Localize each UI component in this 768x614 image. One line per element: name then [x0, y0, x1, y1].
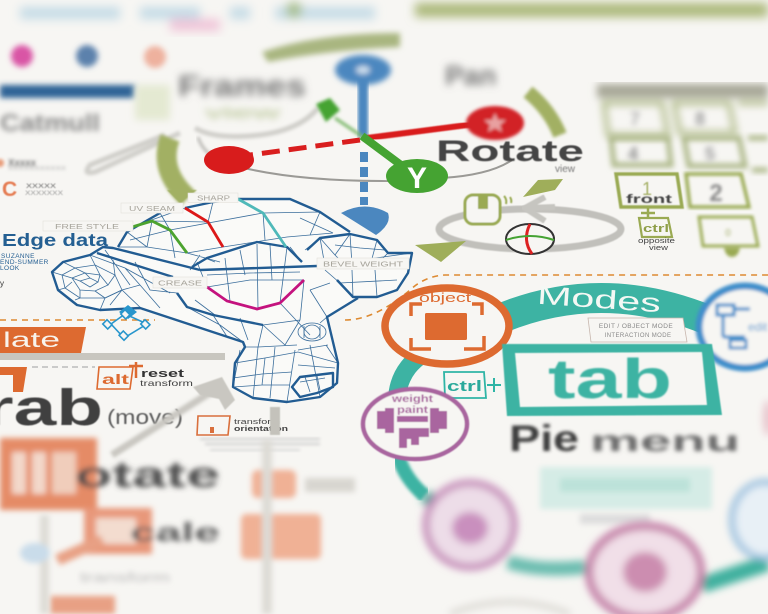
blurred blue bar and gray text [0, 85, 135, 137]
label: bevel weight: BEVEL WEIGHT [323, 260, 404, 268]
gray orbit ellipse [439, 209, 621, 249]
Edge data text block: LOOK [0, 265, 20, 272]
object mode circle [385, 288, 509, 364]
blue mode circle [699, 286, 768, 368]
grab (move) heading [0, 379, 183, 436]
label: bevel weight [317, 258, 409, 269]
key 0 [699, 217, 758, 257]
orange C note: C [2, 178, 17, 201]
olive arrow wedges [415, 179, 563, 262]
orbit arrow [525, 197, 555, 221]
blurred rotate and scale keys: otate [75, 454, 220, 495]
green back axis [316, 98, 363, 137]
label: uv seam [121, 203, 183, 213]
orange G key fragment [0, 367, 27, 392]
blurred heading: Frames: view [205, 105, 281, 122]
icon: vertex selection [103, 305, 150, 340]
blue dashed axis [341, 152, 389, 235]
left edge small notes: Xxxxx [8, 158, 36, 169]
label: crease: CREASE [158, 278, 202, 288]
Rotate heading [436, 135, 584, 175]
label: crease [153, 277, 207, 288]
alt reset transform: transform [140, 378, 193, 388]
blurred heading: Frames: Frames [178, 70, 306, 103]
olive top swoosh [262, 33, 400, 62]
Edge data text block [0, 230, 108, 288]
object mode circle: object [419, 290, 472, 305]
alt reset transform [97, 362, 193, 389]
green Y axis: Y [407, 162, 427, 195]
gray divider [0, 353, 225, 360]
Rotate heading: view [555, 164, 576, 175]
gizmo axes [204, 55, 524, 235]
weight paint circle: paint [397, 405, 429, 416]
Pie menu heading: Pie [509, 418, 579, 459]
left edge small notes [0, 158, 67, 172]
blurred upper keys [597, 91, 768, 135]
ctrl key [638, 218, 675, 252]
blue Z axis top [358, 75, 368, 137]
label: sharp [188, 193, 238, 202]
Translate banner [0, 327, 86, 353]
crease magenta edge [207, 280, 304, 309]
ctrl key: ctrl [643, 223, 669, 235]
numpad keys [597, 91, 768, 257]
key 2 [686, 174, 749, 207]
key digit blur [628, 109, 715, 164]
Pie menu heading [509, 418, 740, 459]
blurred heading: Pan: Pan [445, 60, 496, 91]
olive arcs [167, 92, 560, 198]
blue mode circle: edit [748, 320, 768, 334]
Edit/Object mode note [588, 318, 687, 342]
key 0: 0 [725, 228, 731, 239]
key digit blur: 8 [695, 109, 705, 129]
key 1 front [616, 174, 682, 207]
tab key: tab [548, 347, 672, 410]
Edge data text block: Edge data [2, 230, 108, 250]
small blurred paragraph [200, 438, 320, 451]
Edge data text block: y [0, 279, 4, 288]
Edit/Object mode note: EDIT / OBJECT MODE [599, 323, 673, 330]
blurred gray pill [87, 108, 318, 173]
key digit blur: 4 [628, 144, 638, 164]
orange C note [2, 178, 63, 201]
alt reset transform: alt [102, 371, 130, 387]
blurred teal shortcut box [540, 467, 712, 524]
Modes title: Modes [536, 280, 662, 318]
plus connector [641, 208, 655, 217]
Edit/Object mode note: INTERACTION MODE [605, 333, 671, 339]
ctrl key: view [649, 245, 669, 252]
Edge data text block: SUZANNE [1, 253, 35, 260]
mesh lines [52, 202, 412, 402]
key 2: 2 [709, 180, 723, 207]
weight paint circle: weight [391, 394, 434, 405]
heavy outlines [52, 199, 412, 402]
transform orientation: transform [234, 419, 280, 426]
transform orientation: orientation [234, 426, 288, 433]
dashed section lines [0, 275, 768, 320]
weight paint circle [363, 389, 467, 459]
mouse [465, 195, 511, 224]
ctrl key +: ctrl [447, 378, 482, 395]
blurred heading: Frames [135, 70, 306, 122]
Modes teal ring [397, 280, 708, 496]
Edge data text block: END-SUMMER [0, 259, 49, 266]
blurred rotate and scale keys: transform [80, 569, 170, 585]
ctrl key: opposite [638, 238, 675, 245]
red X axis [367, 124, 475, 138]
orange C note: XXXXXXX [25, 191, 63, 197]
grab (move) heading: (move) [107, 407, 183, 429]
label: free style: FREE STYLE [55, 222, 119, 231]
left edge small notes: XXXXXXXXXXX [8, 166, 67, 172]
green Y axis [362, 136, 448, 195]
gray arrow [112, 377, 235, 455]
blurred right orange keys and rails [20, 440, 355, 614]
red dashed axis [204, 140, 360, 174]
key 1 front: front [626, 192, 672, 206]
free style green edge [132, 221, 187, 253]
label: free style [43, 221, 133, 231]
blurred rotate and scale keys: cale [130, 517, 220, 547]
vertical gray marker [270, 407, 280, 435]
key digit blur: 7 [630, 109, 640, 129]
key 1 front: 1 [642, 179, 652, 199]
Pie menu heading: menu [590, 425, 740, 458]
Rotate heading: Rotate [436, 135, 584, 168]
mouse rotate icon [415, 179, 621, 262]
gray orbit line [198, 137, 512, 181]
alt reset transform: reset [141, 368, 185, 380]
white head fill [52, 199, 412, 402]
Translate banner: late [3, 329, 60, 352]
olive wedge above monkey [167, 190, 197, 203]
blurred rotate and scale keys [0, 438, 220, 614]
sharp teal edge [238, 199, 286, 247]
Suzanne monkey wireframe [43, 193, 412, 402]
tab key [502, 344, 722, 416]
transform orientation [197, 416, 288, 435]
label: sharp: SHARP [197, 194, 230, 202]
orange C note: XXXXX [26, 184, 56, 190]
uv seam red edge [185, 208, 223, 247]
sphere [506, 224, 554, 254]
legend dots [11, 45, 166, 68]
key digit blur: 5 [705, 144, 715, 164]
blurred bottom mode circles [425, 400, 768, 614]
label: uv seam: UV SEAM [129, 204, 175, 213]
blurred blue bar and gray text: Catmull [0, 110, 100, 137]
dashed line [32, 366, 95, 368]
top blurred header band [20, 2, 768, 31]
ctrl key + [444, 372, 501, 398]
